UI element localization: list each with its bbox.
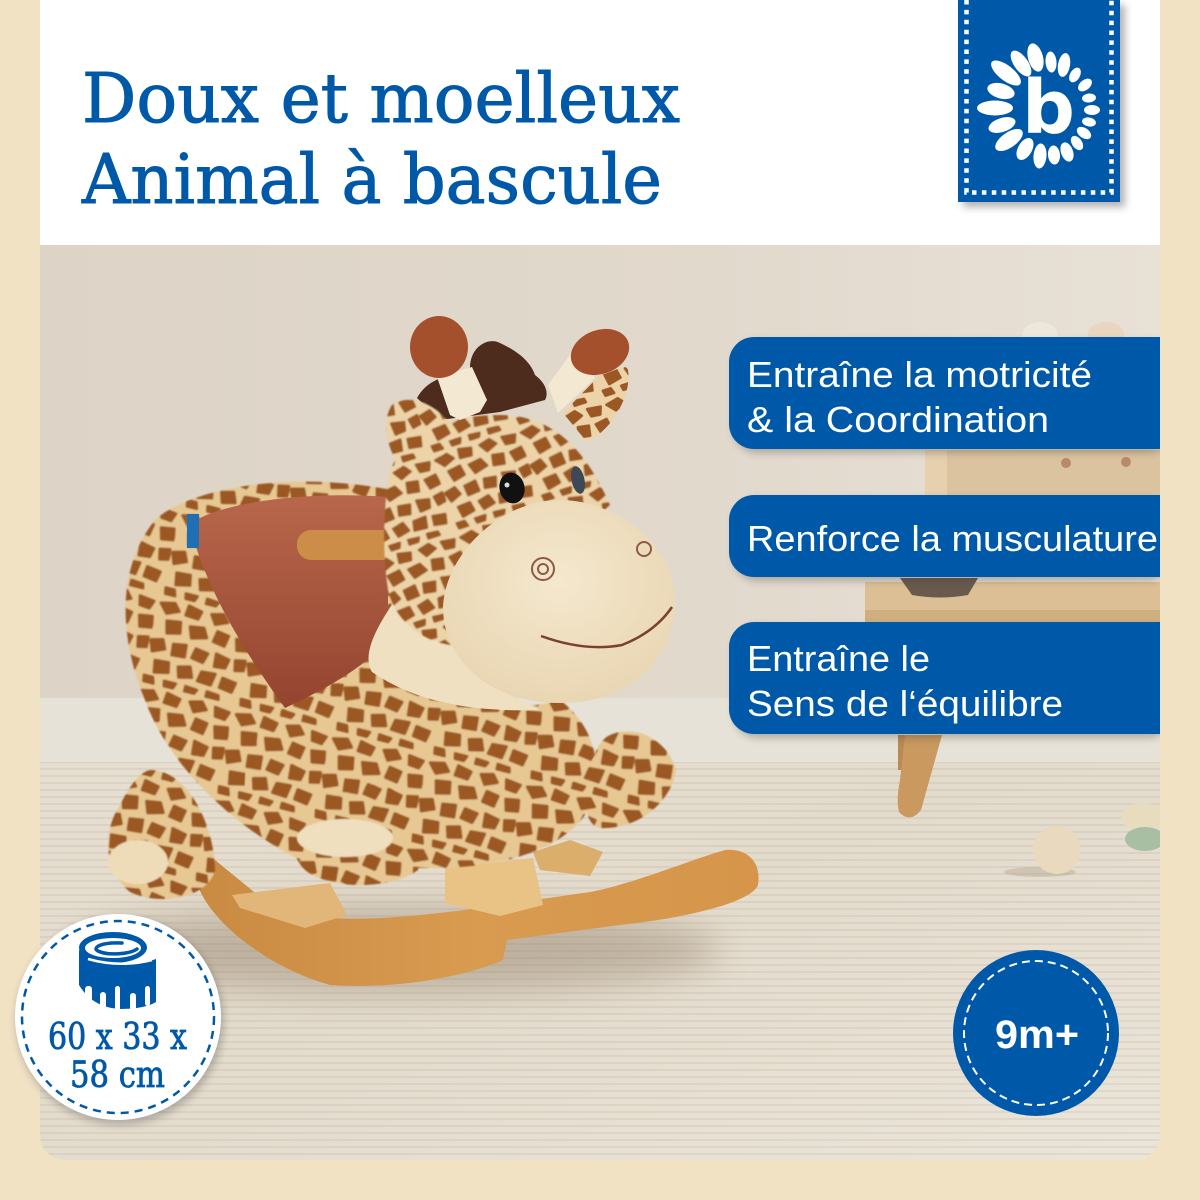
benefit pill: motricité: & la Coordination <box>747 399 1049 440</box>
benefit pill: motricité <box>729 337 1173 453</box>
benefit pill: motricité: Entraîne la motricité <box>747 354 1092 395</box>
nostrils <box>532 542 651 580</box>
age badge: 9m+ <box>995 1013 1079 1057</box>
mouth <box>541 607 672 647</box>
right eye <box>571 466 585 494</box>
logo tag: b <box>1022 65 1075 151</box>
wooden handle <box>297 530 386 560</box>
left eye <box>499 472 525 504</box>
benefit pill: équilibre: Sens de l‘équilibre <box>747 683 1063 724</box>
benefit pill: équilibre: Entraîne le <box>747 638 930 679</box>
mane <box>417 341 547 420</box>
rocking base <box>197 840 759 986</box>
head <box>384 415 610 645</box>
logo tag <box>958 0 1125 207</box>
benefit pill: musculature <box>729 495 1173 581</box>
age badge <box>953 950 1119 1116</box>
right ear <box>563 367 629 442</box>
title: Doux et moelleux <box>82 60 680 139</box>
carpet <box>40 762 1160 1162</box>
left horn <box>410 316 487 420</box>
collar <box>369 603 540 710</box>
left ear <box>386 400 454 470</box>
label tag <box>187 514 199 548</box>
page edge repaint <box>1160 245 1200 1200</box>
back foot <box>108 770 215 899</box>
header panel <box>40 0 1160 246</box>
benefit pill: musculature: Renforce la musculature <box>747 518 1158 559</box>
photo panel <box>40 245 1165 1162</box>
wooden toys <box>1004 803 1165 877</box>
benefit pill: équilibre <box>729 622 1173 738</box>
wall <box>40 245 1160 698</box>
baseboard <box>40 698 858 762</box>
seat cushion <box>190 495 388 708</box>
muzzle <box>443 500 675 703</box>
title <box>81 60 680 220</box>
icon: measuring tape <box>79 932 156 1011</box>
seat shell <box>126 482 392 860</box>
title: Animal à bascule <box>81 141 662 220</box>
shelf furniture <box>865 322 1160 818</box>
toy shadow <box>80 908 720 992</box>
body <box>245 665 596 868</box>
dimensions badge <box>15 914 224 1125</box>
dimensions badge: 58 cm <box>70 1055 165 1096</box>
dimensions badge: 60 x 33 x <box>48 1017 187 1058</box>
right horn <box>548 328 630 413</box>
right leg <box>586 731 676 828</box>
front foot <box>294 785 420 885</box>
